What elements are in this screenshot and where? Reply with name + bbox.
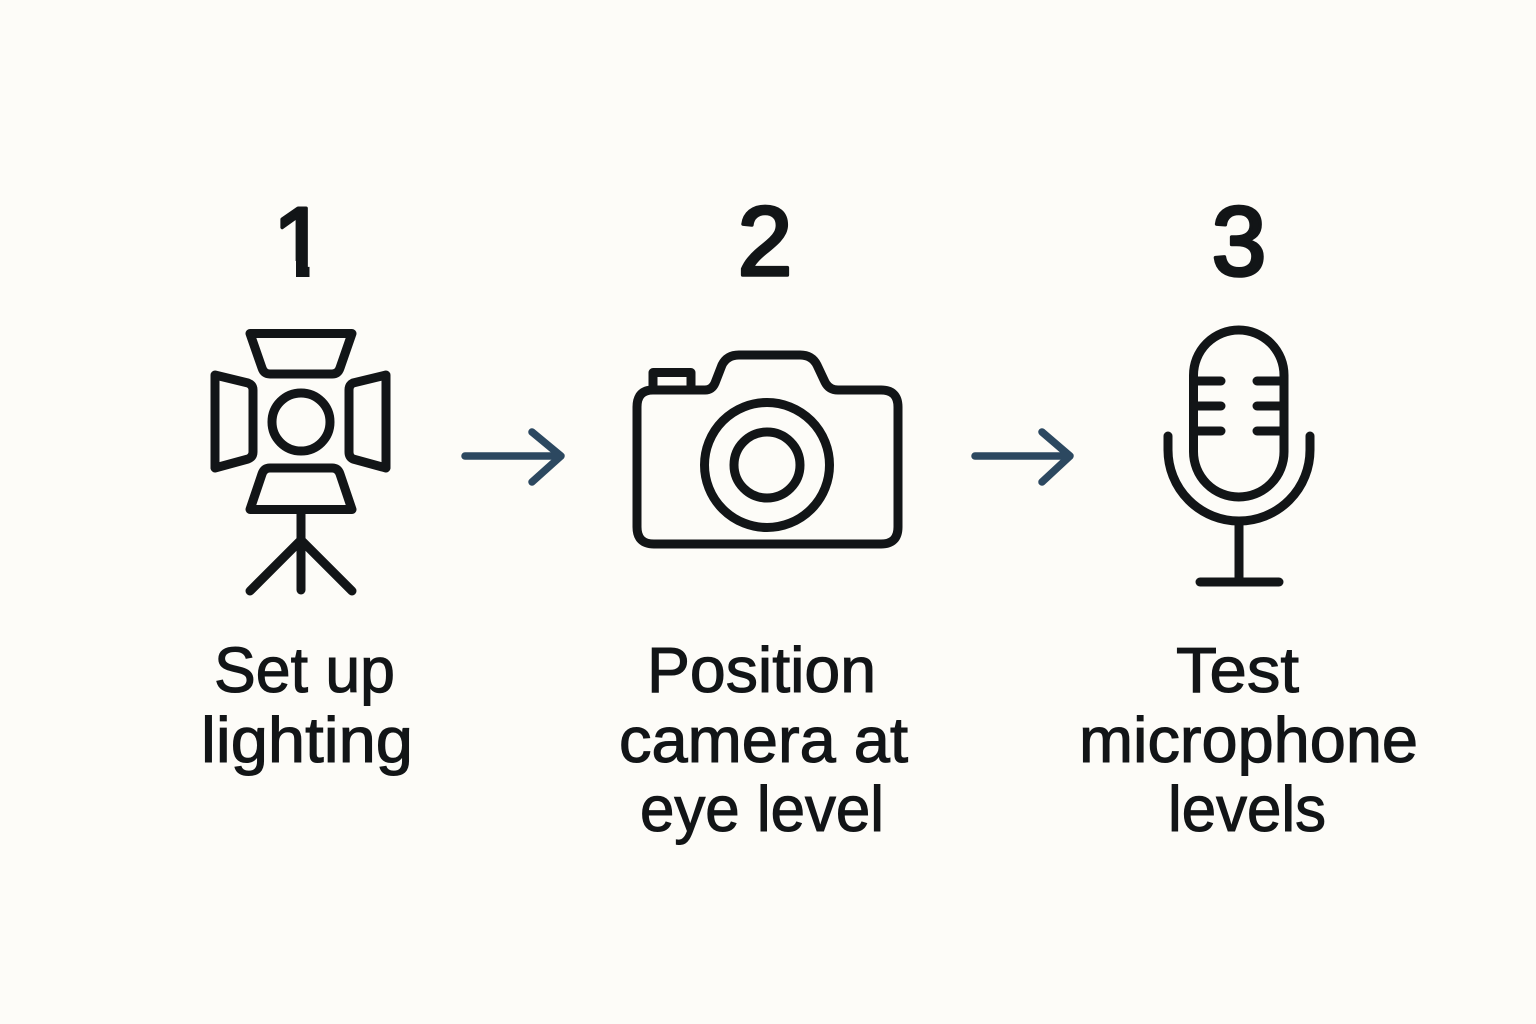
step 1 number: 1 (273, 187, 327, 297)
step 3 number: 3 (1212, 186, 1266, 296)
label: position camera at eye level (619, 634, 908, 845)
label: test microphone levels: levels (1168, 773, 1326, 845)
arrow: step 2 to step 3 (975, 432, 1070, 482)
label: position camera at eye level: eye level (640, 773, 884, 845)
icon: camera (637, 355, 898, 544)
step 2 number: 2 (738, 186, 792, 296)
label: set up lighting: lighting (201, 704, 413, 776)
label: set up lighting: Set up (214, 634, 395, 706)
label: set up lighting (201, 634, 413, 776)
arrow: step 1 to step 2 (465, 432, 561, 482)
label: test microphone levels: microphone (1079, 704, 1418, 776)
label: position camera at eye level: Position (647, 634, 876, 706)
label: test microphone levels: Test (1176, 634, 1299, 706)
icon: studio light (215, 334, 386, 591)
label: test microphone levels (1079, 634, 1418, 845)
icon: microphone (1168, 330, 1310, 582)
label: position camera at eye level: camera at (619, 704, 908, 776)
